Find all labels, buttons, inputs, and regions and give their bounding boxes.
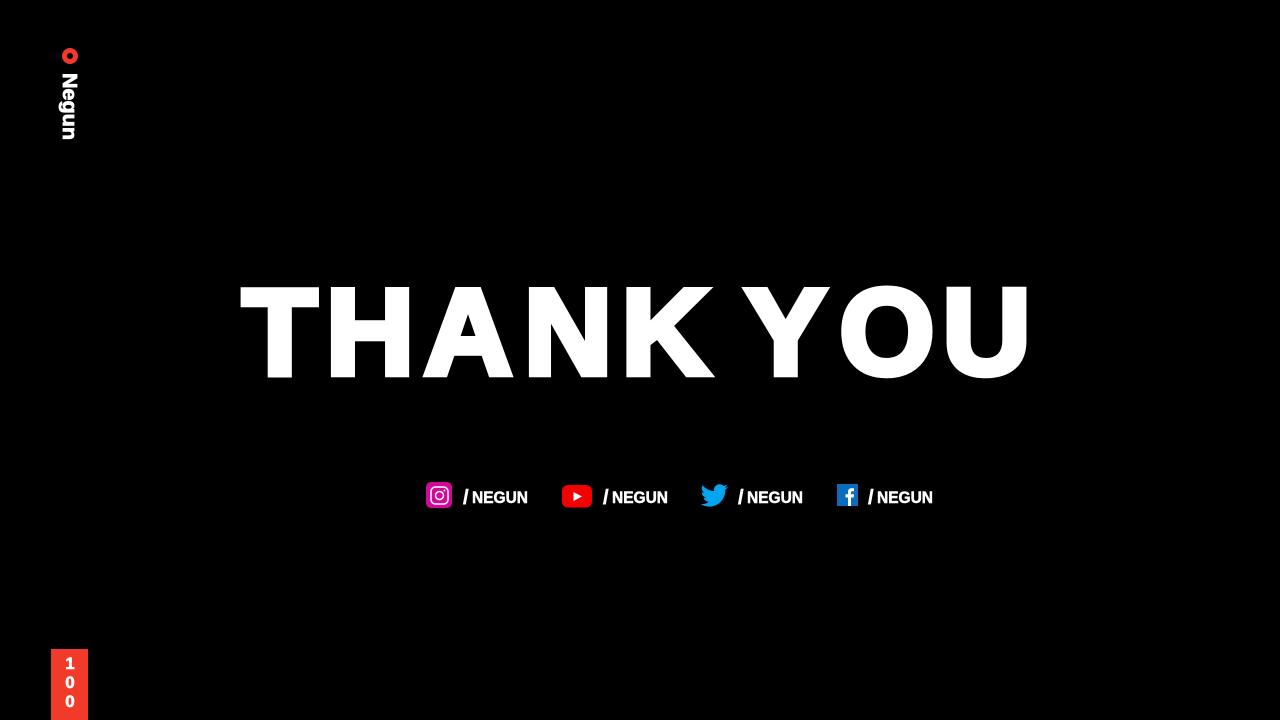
label: twitter handle: NEGUN (747, 488, 803, 507)
label: facebook handle: / (868, 487, 874, 509)
label: youtube handle: / (603, 487, 609, 509)
page number badge (51, 649, 88, 720)
title: THANK YOU (242, 264, 1031, 400)
brand logo (58, 50, 80, 140)
label: twitter handle: / (738, 487, 744, 509)
twitter link (701, 484, 803, 509)
label: facebook handle (868, 487, 933, 509)
label: instagram handle (463, 487, 528, 509)
label: instagram handle: / (463, 487, 469, 509)
icon: facebook (837, 484, 858, 506)
label: instagram handle: NEGUN (472, 488, 528, 507)
brand name: Negun (58, 73, 80, 140)
facebook link (837, 484, 933, 509)
youtube link (562, 485, 668, 509)
label: facebook handle: NEGUN (877, 488, 933, 507)
page number: 0 (65, 692, 75, 711)
page number (65, 654, 75, 711)
icon: brand ring (64, 50, 76, 62)
social links (426, 482, 933, 509)
icon: twitter (701, 484, 728, 507)
label: youtube handle (603, 487, 668, 509)
label: youtube handle: NEGUN (612, 488, 668, 507)
label: twitter handle (738, 487, 803, 509)
page number: 0 (65, 673, 75, 692)
icon: instagram (426, 482, 452, 508)
instagram link (426, 482, 528, 509)
page number: 1 (65, 654, 75, 673)
icon: youtube (562, 485, 592, 508)
